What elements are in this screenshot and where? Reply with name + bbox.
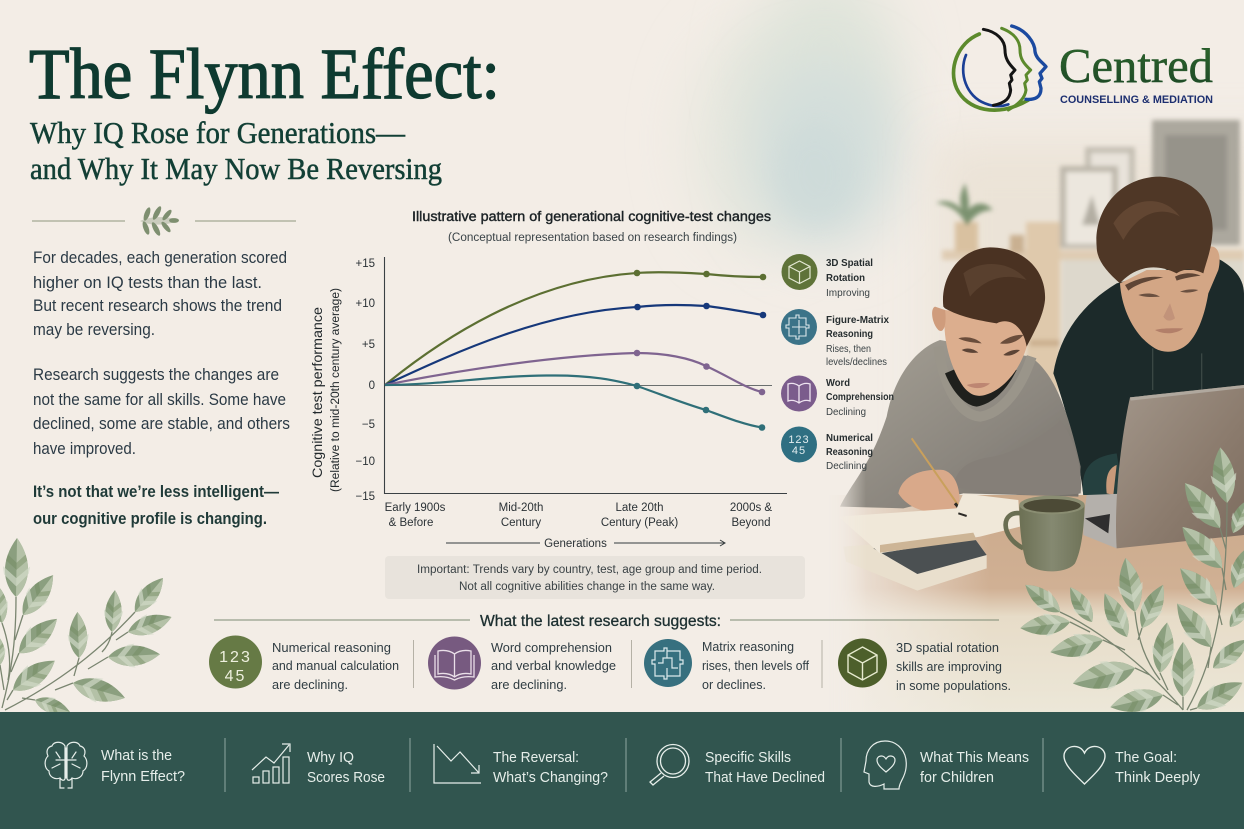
finding: numerical reasoning: Numerical reasoning [272, 640, 391, 655]
series: 3D spatial rotation [385, 270, 766, 385]
laptop [1083, 385, 1244, 548]
intro paragraph: higher on IQ tests than the last. [33, 274, 262, 292]
subtitle: Why IQ Rose for Generations— [30, 115, 406, 150]
footer item: the reversal [434, 744, 608, 786]
subtitle [30, 115, 442, 186]
second paragraph: Research suggests the changes are [33, 366, 279, 384]
legend item: 3D spatial rotation: Improving [826, 287, 870, 299]
legend item: word comprehension: Word [826, 377, 850, 389]
legend item: figure-matrix reasoning [781, 309, 889, 368]
legend item: numerical reasoning: Numerical [826, 432, 873, 444]
y axis label [309, 288, 342, 492]
x axis labels: Century [501, 517, 541, 529]
legend item: numerical reasoning: Declining [826, 460, 867, 472]
teen [1053, 177, 1244, 495]
x axis labels [385, 502, 772, 529]
legend [781, 254, 894, 472]
y axis ticks: −5 [362, 419, 375, 431]
chart: generational cognitive-test changes [309, 209, 805, 599]
second paragraph [33, 366, 290, 458]
research section [209, 613, 1011, 693]
note box: Important: Trends vary by country, test, age group and time period. [417, 564, 762, 576]
footer item: the reversal: What’s Changing? [493, 769, 608, 786]
y axis ticks [355, 258, 375, 503]
legend item: word comprehension: Declining [826, 406, 866, 418]
coffee mug [1006, 496, 1085, 571]
logo tagline: COUNSELLING & MEDIATION [1060, 94, 1213, 106]
footer item: what this means for children: What This Means [920, 749, 1029, 766]
x axis labels: Mid-20th [499, 502, 543, 514]
y axis ticks: +10 [355, 298, 375, 310]
logo mark: three face profiles [954, 26, 1046, 110]
finding: word comprehension: Word comprehension [491, 640, 612, 655]
key message: our cognitive profile is changing. [33, 510, 267, 528]
footer item: what this means for children [864, 741, 1029, 789]
x axis labels: Late 20th [616, 502, 663, 514]
finding: numerical reasoning: are declining. [272, 677, 348, 692]
generations arrow [446, 538, 725, 550]
subtitle: and Why It May Now Be Reversing [30, 151, 442, 186]
photo: boys studying [820, 120, 1244, 712]
key message: It’s not that we’re less intelligent— [33, 483, 279, 501]
series: numerical reasoning [385, 375, 765, 431]
chart subtitle: (Conceptual representation based on research findings) [448, 232, 737, 244]
legend item: figure-matrix reasoning: levels/declines [826, 356, 887, 368]
finding: matrix reasoning: rises, then levels off [702, 658, 809, 673]
finding: 3D spatial rotation: in some populations. [896, 678, 1011, 693]
finding: word comprehension: are declining. [491, 677, 567, 692]
finding: matrix reasoning: or declines. [702, 677, 766, 692]
finding: word comprehension: and verbal knowledge [491, 658, 616, 673]
legend item: word comprehension: Comprehension [826, 391, 894, 403]
finding: 3D spatial rotation: 3D spatial rotation [896, 640, 999, 655]
footer item: the goal [1064, 746, 1200, 786]
x axis labels: 2000s & [730, 502, 772, 514]
chart title: Illustrative pattern of generational cognitive-test changes [412, 209, 771, 224]
y axis label: (Relative to mid-20th century average) [330, 288, 342, 492]
research heading: What the latest research suggests: [480, 613, 721, 630]
title: The Flynn Effect: [29, 34, 500, 114]
y axis ticks: 0 [369, 380, 375, 392]
legend item: 3D spatial rotation: 3D Spatial [826, 257, 873, 269]
footer item: the goal: The Goal: [1115, 749, 1177, 766]
intro paragraph: may be reversing. [33, 321, 155, 339]
legend item: numerical reasoning: 45 [792, 445, 806, 457]
finding: 3D spatial rotation: skills are improving [896, 659, 1002, 674]
axes [384, 257, 787, 494]
footer navigation bar [0, 712, 1244, 829]
series: word comprehension [385, 350, 765, 395]
boy [840, 247, 1081, 515]
second paragraph: declined, some are stable, and others [33, 415, 290, 433]
y axis ticks: +5 [362, 339, 375, 351]
footer item: the reversal: The Reversal: [493, 749, 579, 766]
finding: numerical reasoning: 45 [225, 668, 246, 685]
legend item: figure-matrix reasoning: Figure-Matrix [826, 314, 889, 326]
legend item: numerical reasoning [781, 426, 873, 472]
intro paragraph: For decades, each generation scored [33, 249, 287, 267]
footer item: why IQ scores rose [252, 744, 385, 786]
footer item: what is the Flynn Effect: Flynn Effect? [101, 768, 185, 785]
finding: word comprehension [428, 636, 616, 692]
second paragraph: not the same for all skills. Some have [33, 391, 286, 409]
finding: matrix reasoning [644, 639, 809, 692]
divider with leaf sprig [32, 205, 296, 237]
generations arrow: Generations [544, 538, 607, 550]
watercolor wash [690, 0, 900, 250]
footer item: specific skills: That Have Declined [705, 769, 825, 786]
footer item: why IQ scores rose: Why IQ [307, 749, 354, 766]
intro paragraph: But recent research shows the trend [33, 297, 282, 315]
x axis labels: Early 1900s [385, 502, 446, 514]
logo: Centred Counselling & Mediation [954, 26, 1213, 110]
y axis ticks: +15 [355, 258, 375, 270]
finding: numerical reasoning: and manual calculation [272, 658, 399, 673]
left leaf sprig [0, 538, 175, 720]
legend item: numerical reasoning: Reasoning [826, 446, 873, 458]
footer item: specific skills [650, 744, 825, 786]
second paragraph: have improved. [33, 440, 136, 458]
finding: numerical reasoning: 123 [219, 649, 252, 666]
finding: matrix reasoning: Matrix reasoning [702, 639, 794, 654]
legend item: numerical reasoning: 123 [788, 434, 810, 446]
legend item: 3D spatial rotation [782, 254, 873, 299]
legend item: figure-matrix reasoning: Reasoning [826, 328, 873, 340]
footer item: what is the Flynn Effect [45, 742, 185, 788]
footer item: why IQ scores rose: Scores Rose [307, 769, 385, 786]
note box: Not all cognitive abilities change in the same way. [459, 581, 715, 593]
x axis labels: Beyond [731, 517, 771, 529]
x axis labels: Century (Peak) [601, 517, 678, 529]
x axis labels: & Before [389, 517, 433, 529]
open book and closed book [859, 493, 1020, 590]
y axis ticks: −10 [355, 456, 375, 468]
footer item: what is the Flynn Effect: What is the [101, 747, 172, 764]
legend item: figure-matrix reasoning: Rises, then [826, 343, 871, 355]
intro paragraph [33, 249, 287, 339]
finding: numerical reasoning [209, 636, 399, 692]
legend item: 3D spatial rotation: Rotation [826, 272, 865, 284]
table [820, 495, 1244, 712]
footer item: specific skills: Specific Skills [705, 749, 791, 766]
footer item: the goal: Think Deeply [1115, 769, 1200, 786]
right leaf sprig [1019, 446, 1244, 719]
series: figure-matrix reasoning [385, 303, 766, 385]
key message [33, 483, 279, 528]
legend item: word comprehension [781, 376, 894, 418]
y axis label: Cognitive test performance [309, 307, 325, 478]
logo wordmark: Centred [1059, 38, 1213, 93]
footer item: what this means for children: for Children [920, 769, 994, 786]
y axis ticks: −15 [355, 491, 375, 503]
note box [385, 556, 805, 599]
finding: 3D spatial rotation [838, 638, 1011, 693]
room background [933, 117, 1244, 495]
